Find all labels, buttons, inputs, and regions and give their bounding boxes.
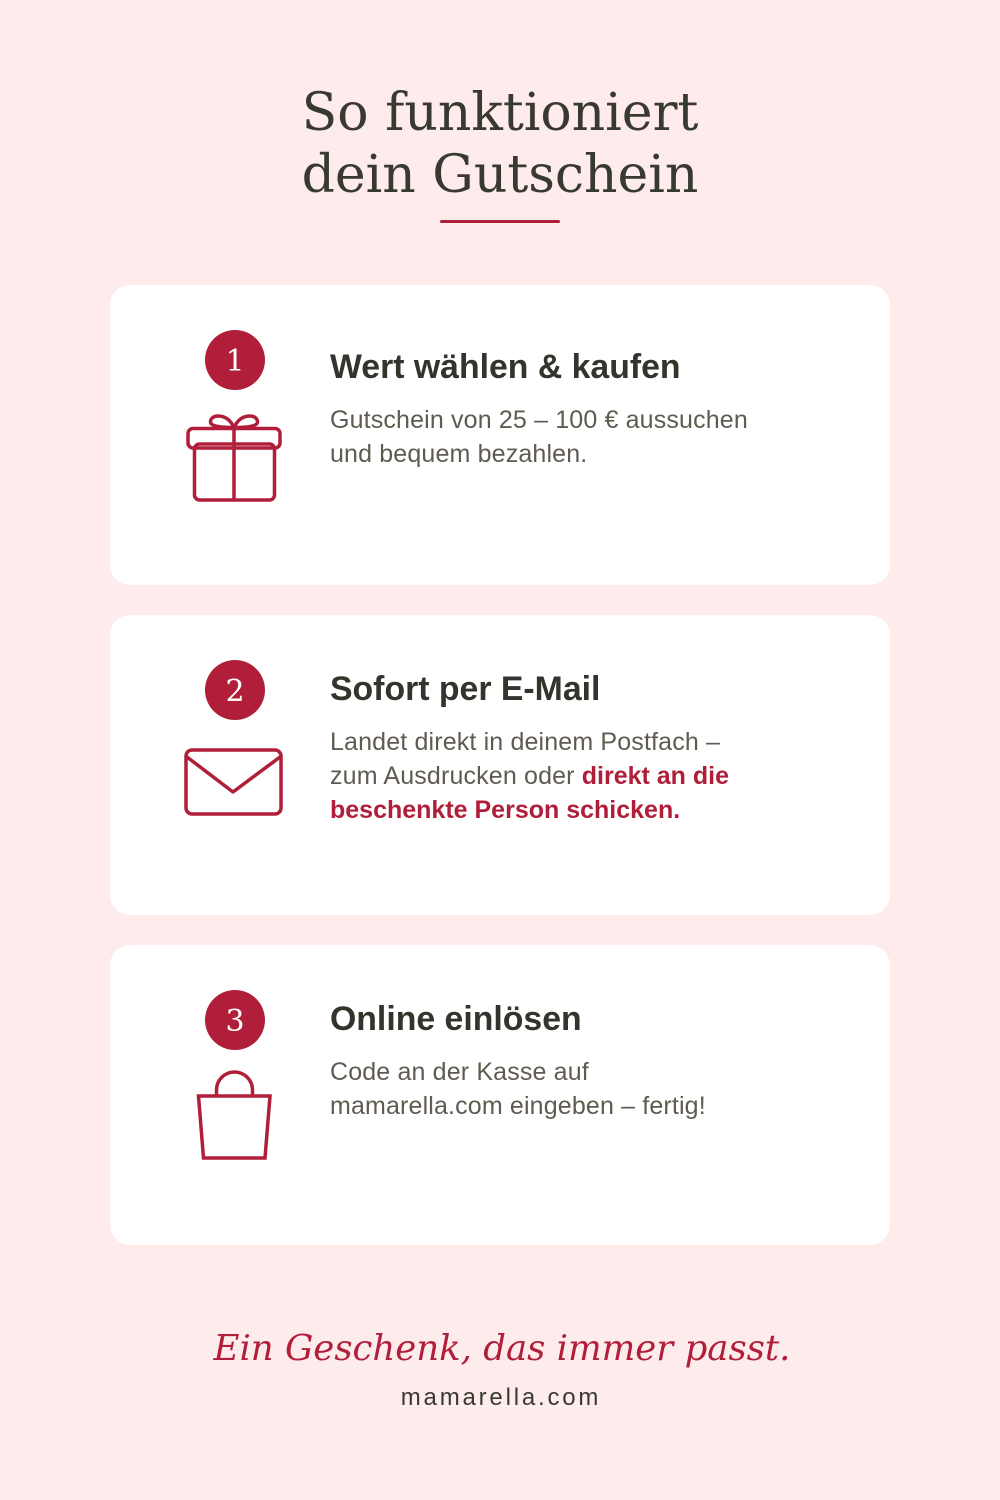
step 2 description: Landet direkt in deinem Postfach – [330, 728, 720, 756]
title underline [440, 220, 560, 223]
step number 2: 2 [225, 674, 245, 709]
panel: step 3 [110, 945, 890, 1245]
step 1 description: und bequem bezahlen. [330, 440, 587, 468]
step number 1: 1 [225, 344, 245, 379]
icon: envelope [184, 748, 283, 816]
step 2 description: zum Ausdrucken oder direkt an die [330, 762, 729, 790]
step 1 description [330, 406, 748, 468]
website: mamarella.com [401, 1384, 601, 1411]
step 2 description [330, 728, 729, 824]
step 3 description [330, 1058, 706, 1120]
step number 3: 3 [225, 1004, 245, 1039]
icon: shopping bag [196, 1070, 272, 1160]
title [302, 83, 698, 205]
panel: step 2 [110, 615, 890, 915]
step number 3 [205, 990, 265, 1050]
title: So funktioniert [302, 83, 698, 143]
step 2 heading: Sofort per E-Mail [330, 670, 600, 708]
step 3 description: Code an der Kasse auf [330, 1058, 589, 1086]
title: dein Gutschein [302, 145, 698, 205]
step 3 heading: Online einlösen [330, 1000, 582, 1038]
step 3 description: mamarella.com eingeben – fertig! [330, 1092, 706, 1120]
step number 2 [205, 660, 265, 720]
panel: step 1 [110, 285, 890, 585]
tagline: Ein Geschenk, das immer passt. [214, 1328, 790, 1369]
step 2 description: beschenkte Person schicken. [330, 796, 680, 824]
icon: gift [186, 414, 282, 502]
step 1 heading: Wert wählen & kaufen [330, 348, 681, 386]
step 1 description: Gutschein von 25 – 100 € aussuchen [330, 406, 748, 434]
step number 1 [205, 330, 265, 390]
